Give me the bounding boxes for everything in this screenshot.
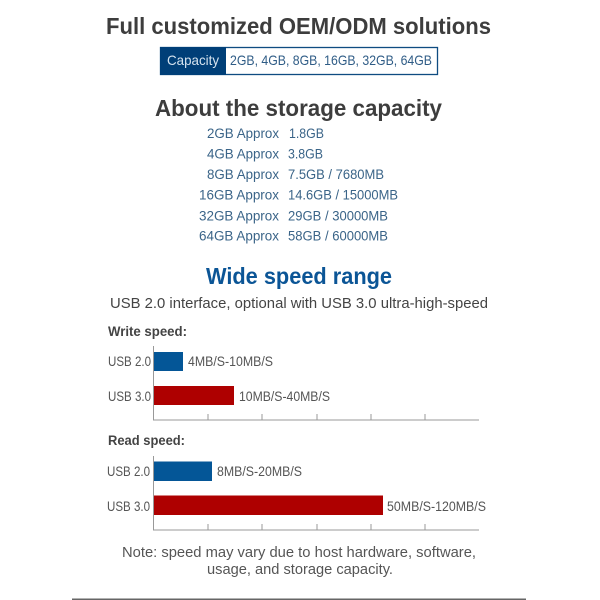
capacity list: 14.6GB / 15000MB [288,188,398,202]
capacity table: Capacity [167,52,219,68]
read speed label: Read speed: [108,433,185,448]
note: usage, and storage capacity. [207,561,393,578]
heading: storage capacity: About the storage capacity [155,95,442,121]
write speed chart: USB 2.0 [108,354,151,369]
write speed chart: 10MB/S-40MB/S [239,389,330,404]
capacity table: 2GB, 4GB, 8GB, 16GB, 32GB, 64GB [230,52,432,68]
write speed label: Write speed: [108,324,187,339]
capacity list: 29GB / 30000MB [288,208,388,224]
capacity list: 3.8GB [288,146,323,162]
read speed chart: 50MB/S-120MB/S [387,499,486,514]
capacity list: 64GB Approx [199,228,279,244]
subtitle: USB 2.0 interface, optional with USB 3.0 ultra-high-speed [110,295,488,312]
title: Full customized OEM/ODM solutions [106,13,491,39]
heading: speed range: Wide speed range [206,263,392,289]
capacity list: 16GB Approx [199,188,279,202]
note [122,544,476,578]
read speed chart [107,456,486,530]
capacity list: 1.8GB [289,126,324,141]
capacity list: 58GB / 60000MB [288,228,388,244]
read speed chart: USB 3.0 [107,499,150,514]
capacity table [160,47,438,75]
capacity list: 8GB Approx [207,167,279,182]
bottom rule [72,598,526,600]
write speed chart: 4MB/S-10MB/S [188,354,273,369]
read speed chart: 8MB/S-20MB/S [217,464,302,479]
capacity list: 7.5GB / 7680MB [288,167,384,182]
write speed chart: USB 3.0 [108,389,151,404]
capacity list: 32GB Approx [199,208,279,224]
capacity list [199,126,398,244]
read speed chart: USB 2.0 [107,464,150,479]
capacity list: 2GB Approx [207,126,279,141]
capacity list: 4GB Approx [207,146,279,162]
write speed chart [108,346,479,420]
note: Note: speed may vary due to host hardware, software, [122,544,476,561]
